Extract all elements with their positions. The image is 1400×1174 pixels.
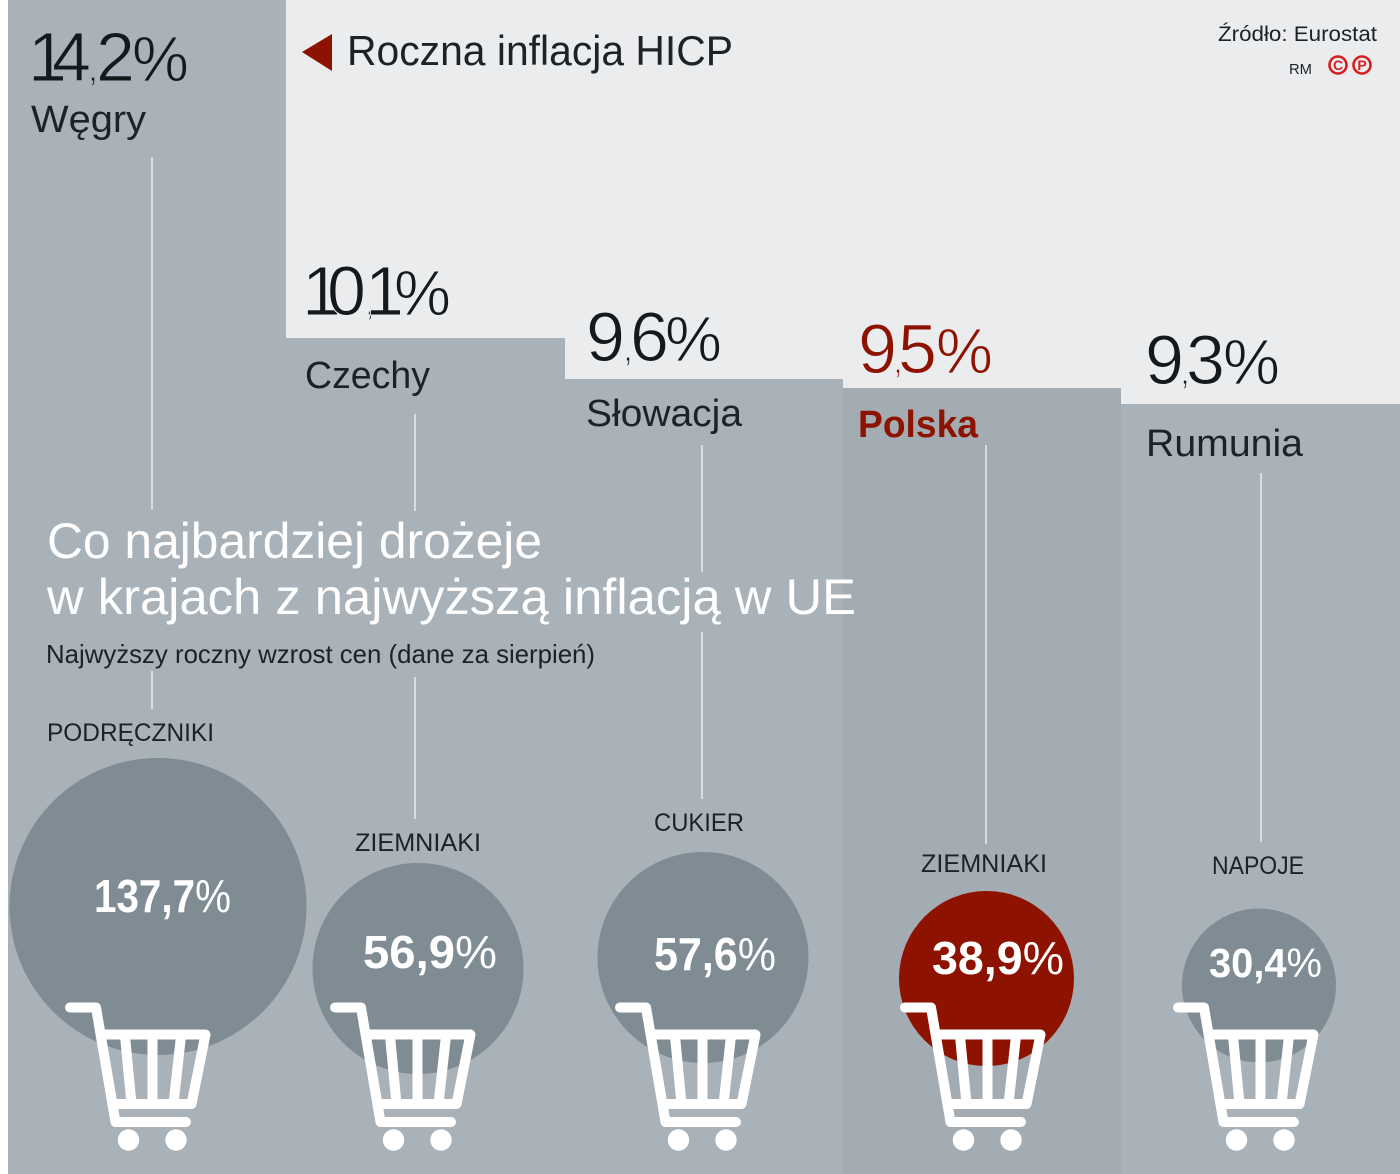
value and country: Węgry (28, 18, 189, 141)
value and country: Czechy (302, 252, 451, 397)
value and country: Polska: 5 (898, 310, 937, 388)
panel: light background (286, 0, 1400, 420)
bubble: Rumunia napoje (1182, 852, 1336, 1062)
value and country: Polska (858, 310, 993, 446)
panel: Węgry column (8, 0, 286, 1174)
value and country: Słowacja (586, 298, 743, 435)
value and country: Czechy: , (365, 282, 375, 323)
bubble: Czechy ziemniaki: 56,9% (363, 926, 497, 978)
bubble: Czechy ziemniaki: ZIEMNIAKI (355, 829, 481, 857)
main title: Co najbardziej drożeje (47, 513, 542, 569)
value and country: Rumunia: % (1223, 326, 1280, 398)
value and country: Słowacja: 6 (630, 298, 669, 376)
main title: w krajach z najwyższą inflacją w UE (46, 569, 856, 625)
icon: shopping cart 4 (905, 1008, 1040, 1151)
value and country: Rumunia: , (1180, 351, 1190, 392)
bubble: Słowacja cukier: 57,6% (654, 928, 776, 980)
panel: Rumunia column (1121, 404, 1400, 1174)
icon: shopping cart 3 (620, 1008, 756, 1151)
value and country: Polska: Polska (858, 404, 979, 446)
icon: shopping cart 2 (335, 1008, 470, 1151)
heading: Roczna inflacja HICP: Roczna inflacja HICP (347, 27, 733, 74)
source and credits (1218, 23, 1377, 78)
value and country: Słowacja: 9 (586, 298, 625, 376)
value and country: Węgry: , (88, 48, 98, 89)
bubble: Rumunia napoje: 30,4% (1209, 940, 1322, 986)
bubble: Słowacja cukier: CUKIER (654, 809, 744, 837)
value and country: Czechy: 1 (365, 252, 404, 330)
bubble: Węgry podręczniki: PODRĘCZNIKI (47, 719, 214, 747)
value and country: Polska: , (893, 340, 903, 381)
source and credits: P (1357, 57, 1367, 73)
value and country: Rumunia: Rumunia (1146, 423, 1304, 465)
source and credits: Źródło: Eurostat (1218, 23, 1377, 46)
bubble: Węgry podręczniki (10, 719, 306, 1055)
bubble: Czechy ziemniaki (312, 829, 524, 1074)
value and country: Węgry: Węgry (31, 99, 146, 141)
bubble: Słowacja cukier (598, 809, 808, 1063)
value and country: Rumunia: 3 (1186, 321, 1225, 399)
source and credits: C (1333, 57, 1343, 73)
value and country: Czechy: 1 (302, 252, 341, 330)
value and country: Czechy: 0 (327, 252, 366, 330)
bubble: Polska ziemniaki: ZIEMNIAKI (921, 850, 1047, 878)
bubble: Węgry podręczniki: 137,7% (94, 870, 231, 922)
value and country: Rumunia: 9 (1145, 321, 1184, 399)
value and country: Węgry: 1 (28, 18, 67, 96)
leader lines (152, 157, 1261, 844)
value and country: Czechy: % (394, 257, 451, 329)
bubble: Rumunia napoje: NAPOJE (1212, 852, 1304, 880)
panel: Polska column (843, 388, 1121, 1174)
bubble: Polska ziemniaki: 38,9% (932, 932, 1064, 984)
subtitle: Najwyższy roczny wzrost cen (dane za sierpień) (46, 639, 595, 669)
panel: Czechy column (286, 338, 565, 1174)
panel: Słowacja column (565, 379, 843, 1174)
source and credits: RM (1289, 61, 1312, 78)
icon: shopping cart 1 (70, 1008, 206, 1151)
bubble: Polska ziemniaki (899, 850, 1074, 1066)
value and country: Polska: 9 (858, 310, 897, 388)
value and country: Słowacja: , (623, 328, 633, 369)
value and country: Polska: % (936, 315, 993, 387)
value and country: Rumunia (1145, 321, 1304, 465)
value and country: Czechy: Czechy (305, 355, 430, 397)
value and country: Węgry: 4 (52, 18, 91, 96)
value and country: Węgry: % (132, 23, 189, 95)
icon: shopping cart 5 (1178, 1008, 1314, 1151)
main title (46, 513, 856, 625)
value and country: Słowacja: Słowacja (586, 393, 743, 435)
value and country: Węgry: 2 (96, 18, 135, 96)
value and country: Słowacja: % (665, 303, 722, 375)
